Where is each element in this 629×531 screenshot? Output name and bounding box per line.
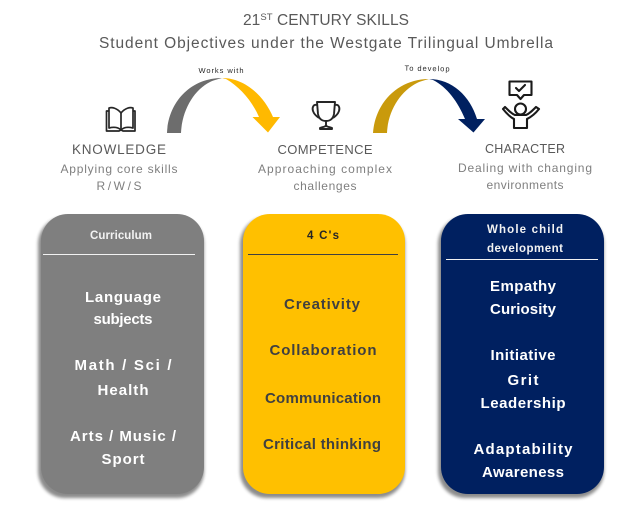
panel: 4 Cs: Creativity [284,296,361,313]
label: knowledge: KNOWLEDGE [72,142,166,157]
panel: curriculum [38,214,204,498]
panel: whole child development: Adaptability [474,441,573,458]
panel: whole child development: Leadership [480,395,566,412]
arrow: works with [167,66,280,133]
panel: curriculum: Health [98,382,148,399]
label: competence: COMPETENCE [278,142,373,157]
panel: 4 Cs [240,214,405,498]
panel: curriculum: Arts / Music / [70,428,177,445]
icon: person with speech bubble [503,82,539,128]
panel: curriculum: Math / Sci / [74,357,172,374]
panel: 4 Cs: Critical thinking [263,436,381,453]
label: competence: Approaching complex [258,162,392,176]
panel: whole child development: development [487,243,563,255]
label: character: environments [486,178,564,192]
label: knowledge [60,142,178,193]
panel: 4 Cs: Communication [265,390,381,407]
label: knowledge: R/W/S [96,179,142,193]
label: knowledge: Applying core skills [60,162,178,176]
arrow: to develop: To develop [404,64,450,73]
panel: curriculum: Language [85,289,161,306]
title: CENTURY SKILLS [273,12,409,29]
label: character: Dealing with changing [458,161,592,175]
panel: curriculum: subjects [94,311,152,328]
title [99,12,553,52]
panel: 4 Cs: 4 C's [307,230,339,242]
panel: whole child development: Curiosity [490,301,557,318]
arrow: works with: Works with [198,66,244,75]
panel: curriculum: Sport [102,451,144,468]
label: competence [258,142,392,193]
panel: 4 Cs: Collaboration [270,342,376,359]
panel: whole child development [438,214,604,498]
icon: book [106,108,135,131]
panel: whole child development: Grit [508,372,538,389]
label: competence: challenges [294,179,356,193]
label: character: CHARACTER [485,142,565,156]
title: ST [260,12,273,23]
title: Student Objectives under the Westgate Trilingual Umbrella [99,35,553,52]
panel: whole child development: Initiative [490,347,556,364]
arrow: to develop [373,64,485,133]
title: 21 [243,12,260,29]
panel: whole child development: Whole child [487,224,563,236]
panel: curriculum: Curriculum [90,230,152,242]
icon: trophy [313,102,339,129]
panel: whole child development: Empathy [490,278,557,295]
label: character [458,142,592,192]
panel: whole child development: Awareness [482,464,564,481]
